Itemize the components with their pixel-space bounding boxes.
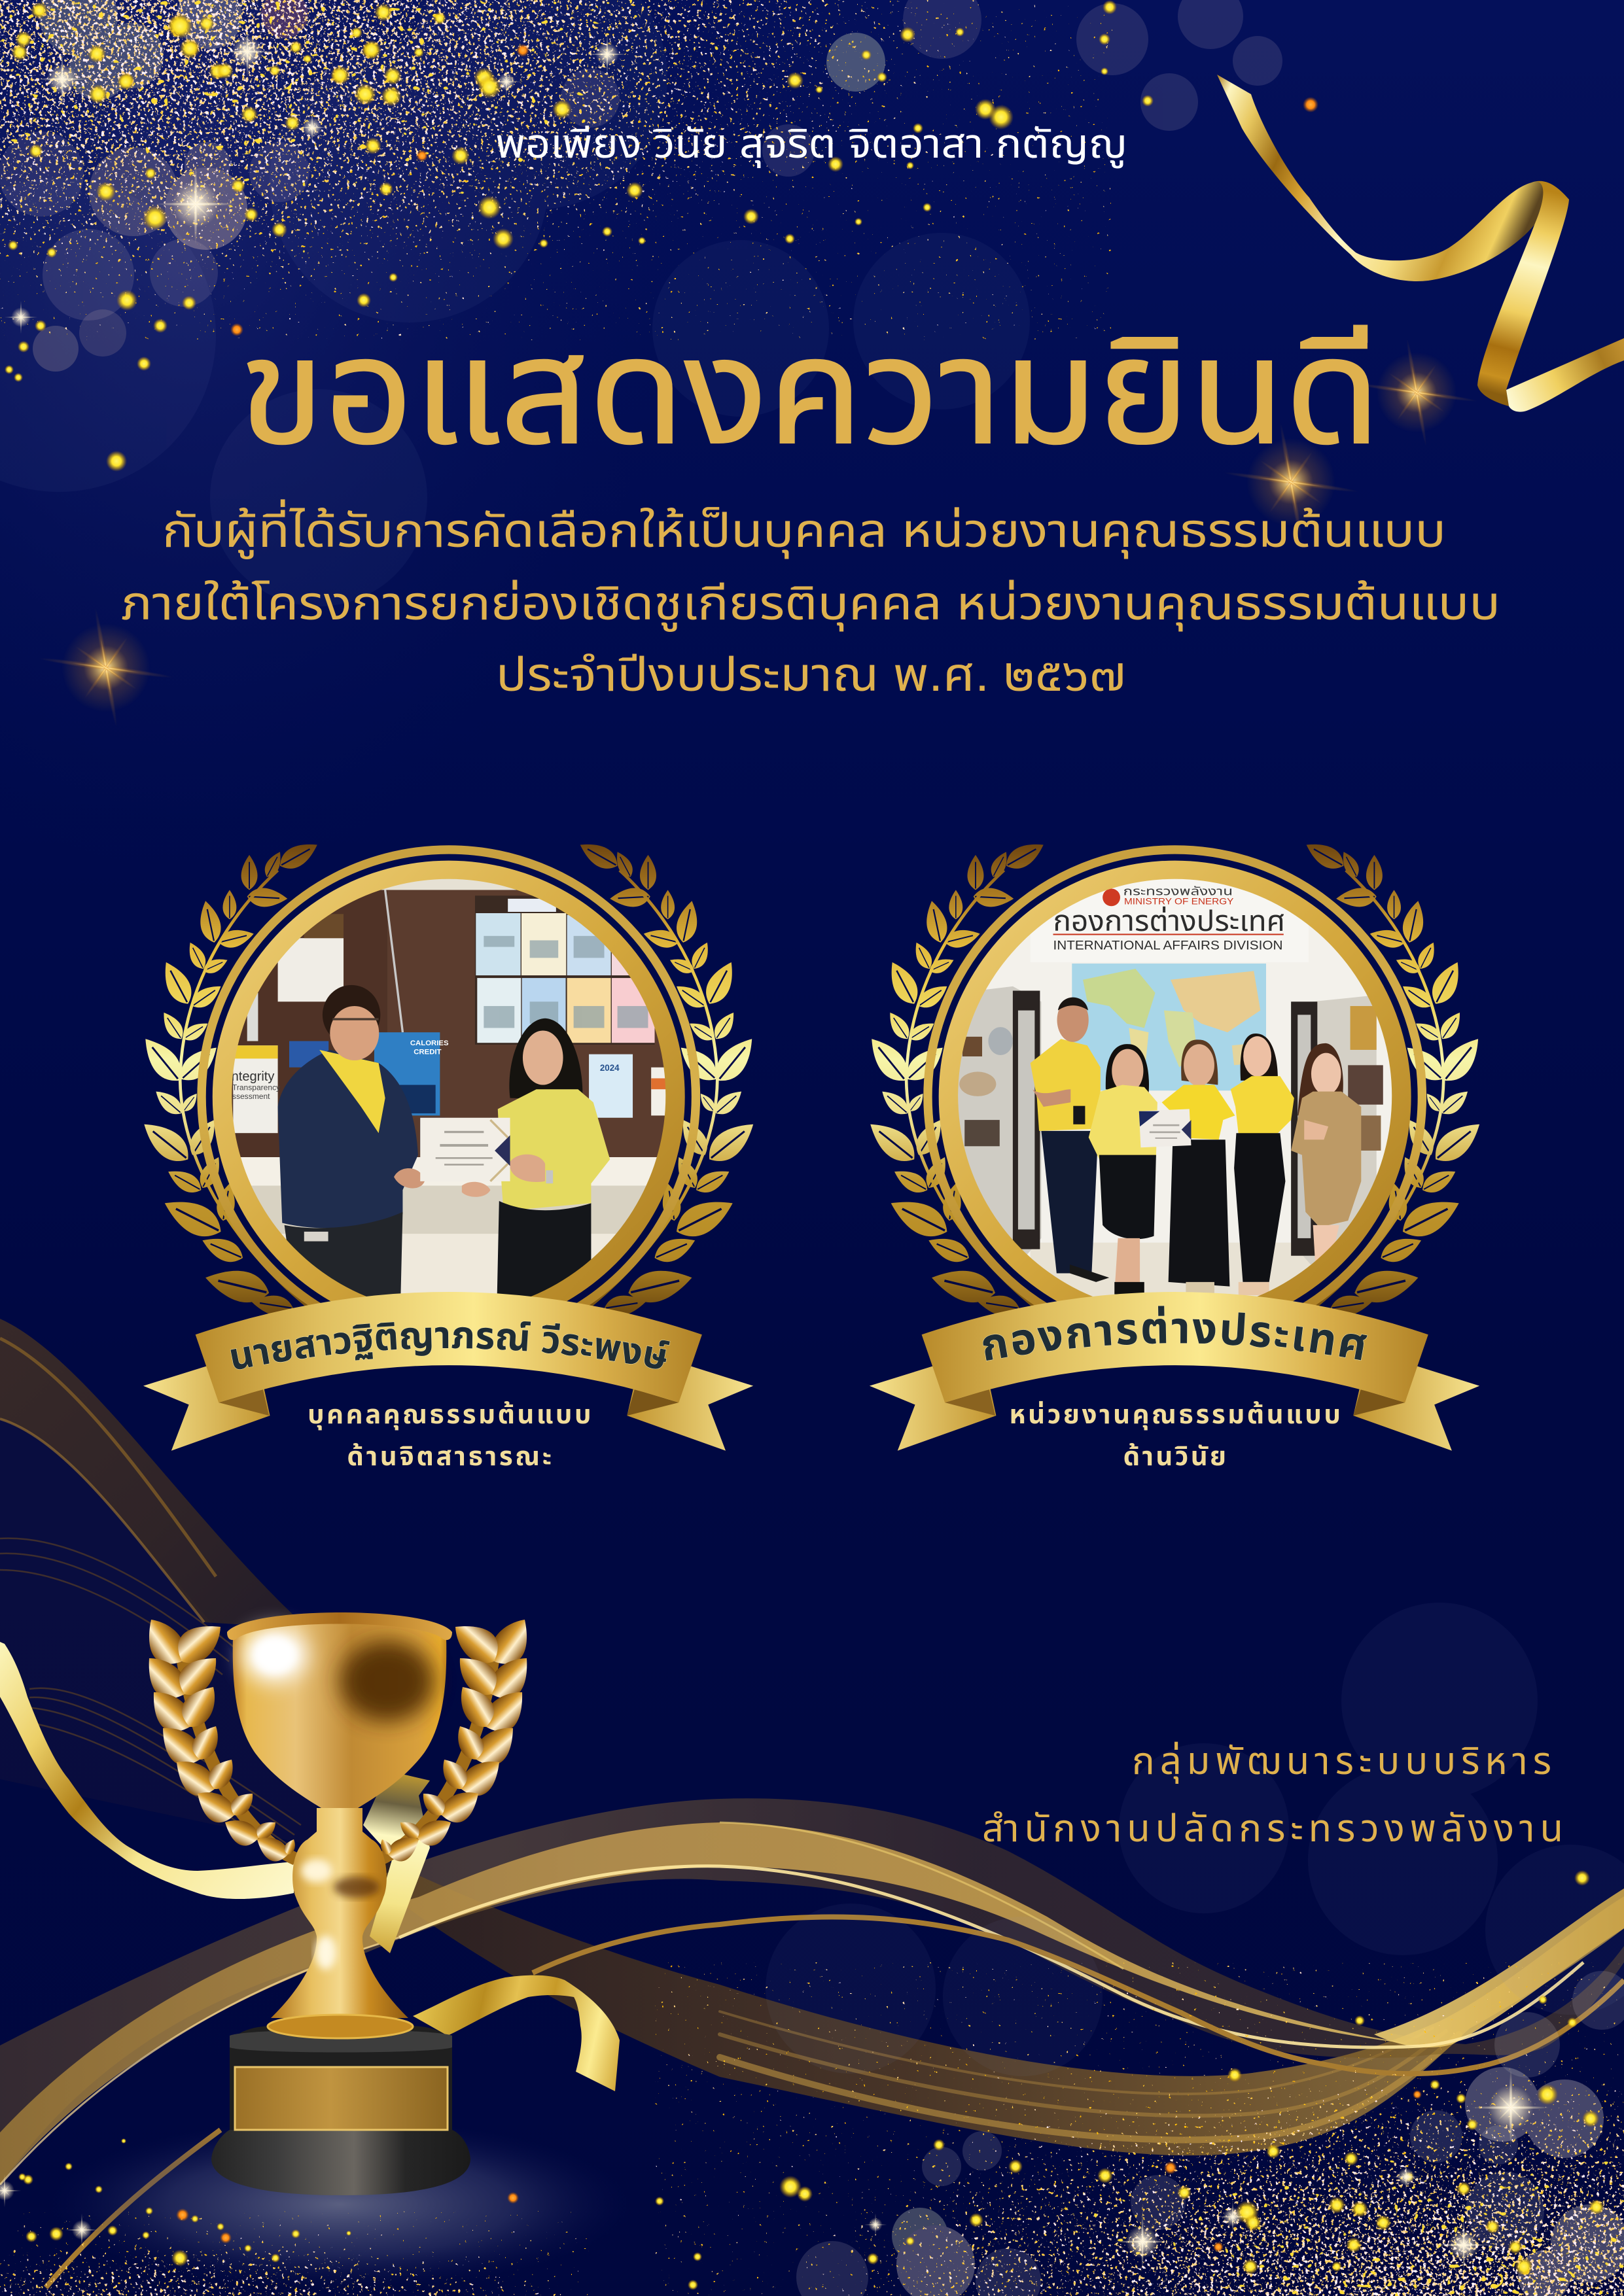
- bottom-left gold glitter: [0, 2211, 589, 2296]
- name ribbon: [143, 1292, 753, 1451]
- posters: [232, 896, 666, 1151]
- person 4: [1231, 1034, 1294, 1295]
- motto text: พอเพียง วินัย สุจริต จิตอาสา กตัญญู: [495, 122, 1127, 169]
- laurel wreath: [864, 835, 1486, 1321]
- title: ขอแสดงความยินดี: [239, 309, 1381, 475]
- display cabinets: [958, 986, 1383, 1264]
- lower wave streaks: [720, 2011, 1459, 2140]
- trophy stage glow: [52, 2119, 627, 2289]
- organisation credit: สำนักงานปลัดกระทรวงพลังงาน: [982, 1807, 1563, 1850]
- bottom-right bokeh circles: [766, 1603, 1624, 2296]
- trophy cup: [227, 1612, 452, 1808]
- posters: ntegrity: [232, 1070, 274, 1084]
- award category: บุคคลคุณธรรมต้นแบบ: [308, 1400, 591, 1431]
- bottom waves: [0, 1319, 1624, 2287]
- award category: หน่วยงานคุณธรรมต้นแบบ: [1010, 1400, 1341, 1431]
- top-left bokeh circles: [0, 0, 1282, 606]
- trophy stem: [268, 1808, 413, 2038]
- photo: certificate handover: [232, 879, 666, 1296]
- laurel wreath: [137, 835, 760, 1321]
- world map: [1072, 964, 1266, 1090]
- person right: [462, 1018, 610, 1304]
- person 1: [1031, 998, 1109, 1282]
- name ribbon: [870, 1292, 1479, 1451]
- certificate: [1139, 1109, 1191, 1147]
- subtitle lines: ประจำปีงบประมาณ พ.ศ. ๒๕๖๗: [496, 649, 1126, 701]
- faint upper-left wave: [0, 1319, 340, 1851]
- photo: team with certificate: [958, 879, 1392, 1296]
- person 5: [1291, 1043, 1361, 1262]
- wall sign: INTERNATIONAL AFFAIRS DIVISION: [1053, 939, 1282, 953]
- wall sign: MINISTRY OF ENERGY: [1124, 897, 1233, 907]
- award category: ด้านวินัย: [1123, 1442, 1226, 1471]
- upper wave halo: [0, 1798, 1624, 2185]
- wall sign: กระทรวงพลังงาน: [1123, 885, 1233, 898]
- corner ribbon: [1217, 75, 1624, 412]
- subtitle lines: กับผู้ที่ได้รับการคัดเลือกให้เป็นบุคคล หน่วยงานคุณธรรมต้นแบบ: [162, 499, 1446, 559]
- award category: ด้านจิตสาธารณะ: [347, 1442, 552, 1471]
- trophy ribbon, right strand: [413, 1975, 620, 2091]
- subtitle lines: ภายใต้โครงการยกย่องเชิดชูเกียรติบุคคล หน่วยงานคุณธรรมต้นแบบ: [121, 578, 1500, 632]
- rising bright ribbon: [1374, 1888, 1624, 2047]
- lower right wave: [340, 1838, 1624, 2155]
- golden star flares: [38, 338, 1479, 729]
- person 3: [1162, 1039, 1235, 1293]
- award panel: organisation: [870, 844, 1480, 1471]
- trophy base: [211, 2026, 470, 2195]
- award category: [1010, 1400, 1341, 1471]
- posters: ssessment: [232, 1092, 270, 1101]
- certificate: [420, 1118, 510, 1181]
- organisation credit: กลุ่มพัฒนาระบบบริหาร: [1132, 1740, 1551, 1784]
- trophy laurels: [135, 1612, 540, 1866]
- posters: 2024: [600, 1063, 620, 1073]
- posters: CREDIT: [414, 1049, 442, 1056]
- organisation credit: [982, 1740, 1563, 1850]
- wave highlights: [0, 1822, 1624, 2287]
- award panel: individual: [143, 844, 754, 1471]
- trophy: [135, 1612, 540, 2195]
- organisation name: กองการต่างประเทศ: [983, 1306, 1368, 1361]
- gold rings: [928, 850, 1422, 1344]
- gold rings: [202, 850, 696, 1344]
- trophy ribbon, left strand: [0, 1642, 294, 1899]
- wall sign: [1053, 886, 1284, 950]
- upper wave bright core: [0, 1822, 1412, 2185]
- award category: [308, 1400, 591, 1471]
- posters: CALORIES: [410, 1039, 449, 1047]
- posters: Transparency: [232, 1083, 280, 1092]
- person 2: [1089, 1044, 1157, 1295]
- bottom-right gold glitter: [654, 1962, 1624, 2296]
- trophy ribbon, rising strand: [363, 1771, 430, 1953]
- name: นายสาวฐิติญาภรณ์ วีระพงษ์: [230, 1321, 670, 1370]
- top-left gold glitter: [0, 0, 1112, 340]
- subtitle lines: [121, 499, 1500, 701]
- wall sign: กองการต่างประเทศ: [1053, 905, 1285, 937]
- person left: [278, 985, 425, 1304]
